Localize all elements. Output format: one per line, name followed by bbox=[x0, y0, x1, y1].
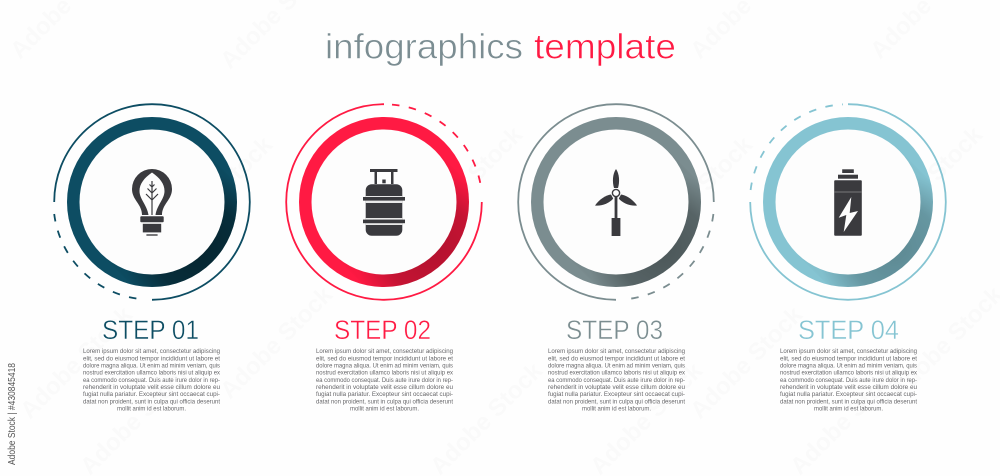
watermark: Adobe Stock bbox=[215, 281, 338, 404]
circle badge: step 03 bbox=[517, 103, 715, 301]
text block: step 04: ea commodo consequat. Duis aute irure dolor in rep- bbox=[780, 377, 917, 384]
text block: step 04 bbox=[780, 348, 918, 412]
text block: step 02: mollit anim id est laborum. bbox=[350, 405, 419, 412]
watermark: Adobe Stock bbox=[685, 301, 808, 424]
text block: step 02: dolore magna aliqua. Ut enim ad minim veniam, quis bbox=[316, 362, 454, 370]
watermark: Adobe Stock bbox=[155, 131, 278, 254]
text block: step 02: datat non proident, sunt in culpa qui officia deserunt bbox=[316, 398, 453, 405]
text block: step 04: fugiat nulla pariatur. Excepteur sint occaecat cupi- bbox=[780, 391, 917, 398]
text block: step 02: Lorem ipsum dolor sit amet, consectetur adipiscing bbox=[316, 348, 453, 355]
text block: step 03: elit, sed do eiusmod tempor incididunt ut labore et bbox=[548, 355, 685, 362]
title bbox=[325, 26, 676, 66]
watermark: Adobe Stock bbox=[865, 121, 988, 244]
text block: step 02: rehenderit in voluptate velit esse cillum dolore eu bbox=[316, 384, 453, 391]
text block: step 01: ea commodo consequat. Duis aute irure dolor in rep- bbox=[83, 377, 220, 384]
text block: step 01: rehenderit in voluptate velit esse cillum dolore eu bbox=[83, 384, 220, 391]
panel: step 03 bbox=[517, 103, 715, 410]
title: infographics bbox=[325, 26, 523, 66]
text block: step 01: nostrud exercitation ullamco laboris nisi ut aliquip ex bbox=[83, 370, 221, 377]
text block: step 01: fugiat nulla pariatur. Excepteur sint occaecat cupi- bbox=[83, 391, 220, 398]
text block: step 03: datat non proident, sunt in culpa qui officia deserunt bbox=[548, 398, 685, 405]
text block: step 02: ea commodo consequat. Duis aute irure dolor in rep- bbox=[316, 377, 453, 384]
panel: step 02 bbox=[285, 103, 483, 410]
panel: step 01 bbox=[53, 103, 251, 410]
text block: step 01: mollit anim id est laborum. bbox=[117, 405, 186, 412]
text block: step 04: datat non proident, sunt in culpa qui officia deserunt bbox=[780, 398, 917, 405]
text block: step 03: nostrud exercitation ullamco laboris nisi ut aliquip ex bbox=[548, 370, 686, 377]
watermark: Adobe Stock bbox=[405, 121, 528, 244]
circle badge: step 01 bbox=[53, 103, 251, 301]
text block: step 02 bbox=[316, 348, 454, 412]
title: template bbox=[534, 26, 676, 66]
icon: battery with bolt bbox=[834, 169, 862, 236]
watermark: Adobe Stock bbox=[15, 301, 138, 424]
text block: step 02: fugiat nulla pariatur. Excepteur sint occaecat cupi- bbox=[316, 391, 453, 398]
text block: step 02: elit, sed do eiusmod tempor incididunt ut labore et bbox=[316, 355, 453, 362]
text block: step 04: Lorem ipsum dolor sit amet, consectetur adipiscing bbox=[780, 348, 917, 355]
watermark: Adobe Stock bbox=[635, 131, 758, 254]
text block: step 03: rehenderit in voluptate velit esse cillum dolore eu bbox=[548, 384, 685, 391]
text block: step 04: elit, sed do eiusmod tempor incididunt ut labore et bbox=[780, 355, 917, 362]
text block: step 02: nostrud exercitation ullamco laboris nisi ut aliquip ex bbox=[316, 370, 454, 377]
text block: step 03: ea commodo consequat. Duis aute irure dolor in rep- bbox=[548, 377, 685, 384]
text block: step 03: fugiat nulla pariatur. Excepteur sint occaecat cupi- bbox=[548, 391, 685, 398]
text block: step 03: mollit anim id est laborum. bbox=[582, 405, 651, 412]
text block: step 01: datat non proident, sunt in culpa qui officia deserunt bbox=[83, 398, 220, 405]
circle badge: step 02 bbox=[285, 103, 483, 301]
text block: step 01: elit, sed do eiusmod tempor incididunt ut labore et bbox=[83, 355, 220, 362]
text block: step 01: Lorem ipsum dolor sit amet, consectetur adipiscing bbox=[83, 348, 220, 355]
stock credit: Adobe Stock | #430845418 bbox=[7, 363, 18, 465]
text block: step 03: dolore magna aliqua. Ut enim ad minim veniam, quis bbox=[548, 362, 686, 370]
text block: step 03 bbox=[548, 348, 686, 412]
icon: gas cylinder bbox=[363, 169, 405, 236]
text block: step 04: dolore magna aliqua. Ut enim ad minim veniam, quis bbox=[780, 362, 918, 370]
icon: wind turbine bbox=[595, 169, 637, 236]
heading: step 04: STEP 04 bbox=[798, 315, 899, 345]
text block: step 03: Lorem ipsum dolor sit amet, consectetur adipiscing bbox=[548, 348, 685, 355]
panel: step 04 bbox=[749, 103, 947, 410]
text block: step 04: mollit anim id est laborum. bbox=[814, 405, 883, 412]
text block: step 01 bbox=[83, 348, 221, 412]
heading: step 03: STEP 03 bbox=[566, 315, 663, 345]
text block: step 04: rehenderit in voluptate velit esse cillum dolore eu bbox=[780, 384, 917, 391]
circle badge: step 04 bbox=[749, 103, 947, 301]
text block: step 01: dolore magna aliqua. Ut enim ad minim veniam, quis bbox=[83, 362, 221, 370]
heading: step 01: STEP 01 bbox=[102, 315, 199, 345]
text block: step 04: nostrud exercitation ullamco laboris nisi ut aliquip ex bbox=[780, 370, 918, 377]
heading: step 02: STEP 02 bbox=[334, 315, 431, 345]
icon: leaf light bulb bbox=[132, 169, 172, 236]
